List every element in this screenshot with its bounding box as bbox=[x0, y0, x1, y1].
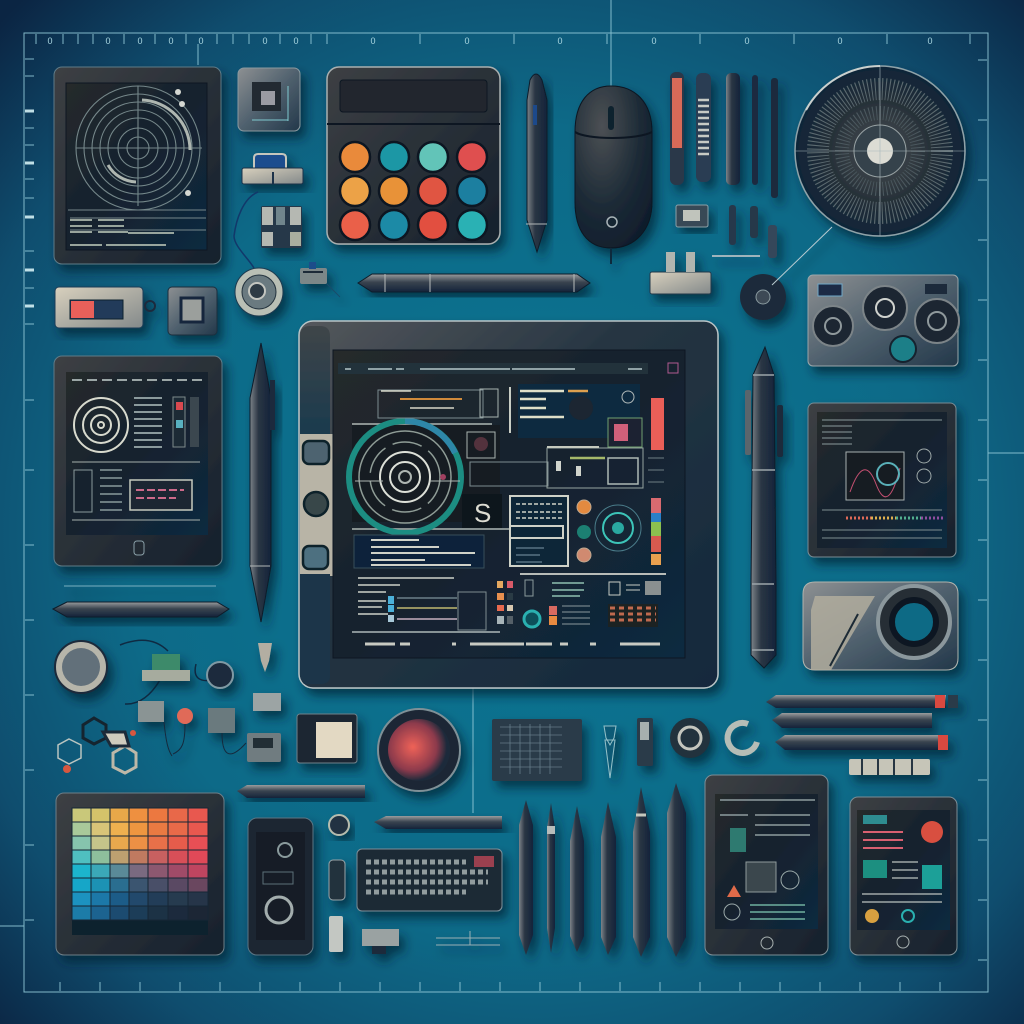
tablet: top left radar bbox=[54, 67, 221, 264]
ruler numerals: 0 bbox=[293, 36, 299, 46]
pen left horizontal bbox=[53, 586, 229, 617]
lens red bbox=[378, 709, 460, 791]
round speaker disc bbox=[795, 66, 965, 236]
mini pens top right bbox=[670, 72, 778, 258]
ruler numerals: 0 bbox=[927, 36, 933, 46]
bottom toolbar bbox=[365, 642, 660, 646]
connector clip bbox=[242, 154, 303, 184]
cable bbox=[234, 192, 258, 268]
upper panels bbox=[378, 384, 664, 488]
battery module bbox=[55, 287, 155, 328]
bottom pen row bbox=[519, 783, 686, 957]
camera control deck bbox=[808, 275, 959, 366]
knob bbox=[235, 268, 283, 316]
round button bbox=[55, 641, 107, 693]
pen short bbox=[237, 785, 365, 798]
stylus top bbox=[526, 74, 547, 252]
ruler numerals: 0 bbox=[47, 36, 53, 46]
keyboard bbox=[357, 849, 502, 911]
switch block bbox=[261, 206, 302, 248]
ruler numerals bbox=[47, 36, 933, 46]
toolbar bbox=[338, 363, 678, 374]
small module cluster bbox=[138, 693, 281, 762]
small parts bottom bbox=[329, 860, 500, 954]
phone bbox=[248, 818, 313, 955]
square button bbox=[168, 287, 217, 335]
ruler numerals: 0 bbox=[262, 36, 268, 46]
side rail bbox=[300, 326, 333, 684]
small switch bbox=[676, 205, 708, 227]
mouse bbox=[575, 86, 652, 264]
ruler numerals: 0 bbox=[464, 36, 470, 46]
tablet: right mid bbox=[808, 403, 956, 557]
main screen bbox=[333, 350, 685, 658]
ruler numerals: 0 bbox=[168, 36, 174, 46]
grid panel bbox=[492, 719, 582, 781]
colour palette bbox=[327, 67, 500, 244]
ruler numerals: 0 bbox=[105, 36, 111, 46]
selection block bbox=[510, 496, 661, 566]
plug connector bbox=[650, 252, 760, 294]
ruler numerals: 0 bbox=[370, 36, 376, 46]
stylus left bbox=[250, 343, 275, 622]
ruler numerals: 0 bbox=[744, 36, 750, 46]
tablet bottom two bbox=[850, 797, 957, 955]
S glyph bbox=[462, 494, 502, 528]
pen short two bbox=[374, 816, 502, 829]
colour grid tablet bbox=[56, 793, 224, 955]
ruler numerals: 0 bbox=[651, 36, 657, 46]
circuit cluster bbox=[120, 640, 272, 704]
beige square bbox=[297, 714, 357, 763]
gems and small parts bbox=[604, 718, 757, 778]
small ring bbox=[329, 815, 349, 835]
round dial bbox=[740, 227, 832, 320]
tablet bottom one bbox=[705, 775, 828, 955]
list panel bbox=[352, 535, 500, 632]
camera bbox=[803, 582, 958, 670]
tablet: left mid bbox=[54, 356, 222, 566]
large pen right bbox=[745, 347, 783, 668]
S glyph: S bbox=[474, 498, 491, 528]
radar panel bbox=[349, 421, 537, 533]
right pen stack bbox=[766, 695, 958, 775]
lower right panels bbox=[497, 574, 666, 627]
chip module top bbox=[238, 68, 300, 131]
ruler numerals: 0 bbox=[198, 36, 204, 46]
main tablet bbox=[299, 321, 718, 688]
hexagon molecule bbox=[58, 718, 136, 773]
ruler numerals: 0 bbox=[137, 36, 143, 46]
small tag box bbox=[300, 262, 340, 297]
horizontal pen top bbox=[358, 274, 590, 292]
ruler numerals: 0 bbox=[837, 36, 843, 46]
ruler numerals: 0 bbox=[557, 36, 563, 46]
